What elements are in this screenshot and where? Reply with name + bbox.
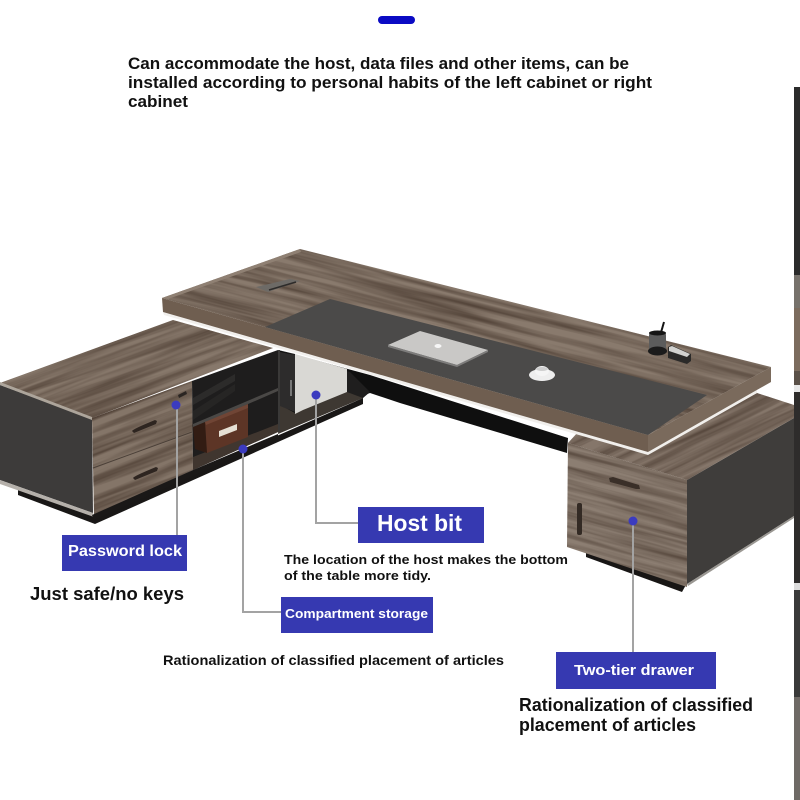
text: two-tier drawer caption: Rationalization of classified [519, 695, 753, 715]
icon: laptop [388, 331, 488, 367]
callout: compartment storage [238, 444, 433, 633]
callout: password lock [62, 400, 187, 571]
illustration: executive desk [0, 249, 794, 592]
heading text: cabinet [128, 92, 188, 111]
leather desk pad [265, 299, 707, 435]
heading text [128, 54, 652, 111]
callout: host bit [312, 390, 484, 543]
callout: two-tier drawer [556, 516, 716, 689]
text: compartment caption: Rationalization of classified placement of articles [163, 652, 504, 668]
right cabinet [567, 393, 794, 592]
desk top [162, 249, 771, 455]
host bay [278, 350, 370, 434]
icon: cable grommet [256, 279, 300, 292]
text: two-tier drawer caption [519, 695, 753, 735]
heading text: Can accommodate the host, data files and other items, can be [128, 54, 629, 73]
right edge strip [794, 87, 800, 800]
text: two-tier drawer caption: placement of articles [519, 715, 696, 735]
icon: storage box [193, 404, 248, 453]
heading text: installed according to personal habits of the left cabinet or right [128, 73, 652, 92]
callout: password lock: Password lock [68, 543, 182, 560]
text: host bit caption: The location of the host makes the bottom [284, 552, 568, 567]
icon: pen holder and tray [648, 322, 691, 364]
left cabinet [0, 320, 280, 516]
callout: host bit: Host bit [377, 510, 462, 536]
callout: compartment storage: Compartment storage [285, 606, 428, 621]
text: host bit caption [284, 552, 568, 583]
callout: two-tier drawer: Two-tier drawer [574, 662, 694, 679]
modesty panel under desk [278, 350, 568, 453]
text: password lock caption: Just safe/no keys [30, 584, 184, 604]
text: host bit caption: of the table more tidy. [284, 568, 431, 583]
icon: coffee cup [529, 366, 555, 381]
icon: drawer handles and lock [132, 391, 187, 480]
accent bar [378, 16, 415, 24]
